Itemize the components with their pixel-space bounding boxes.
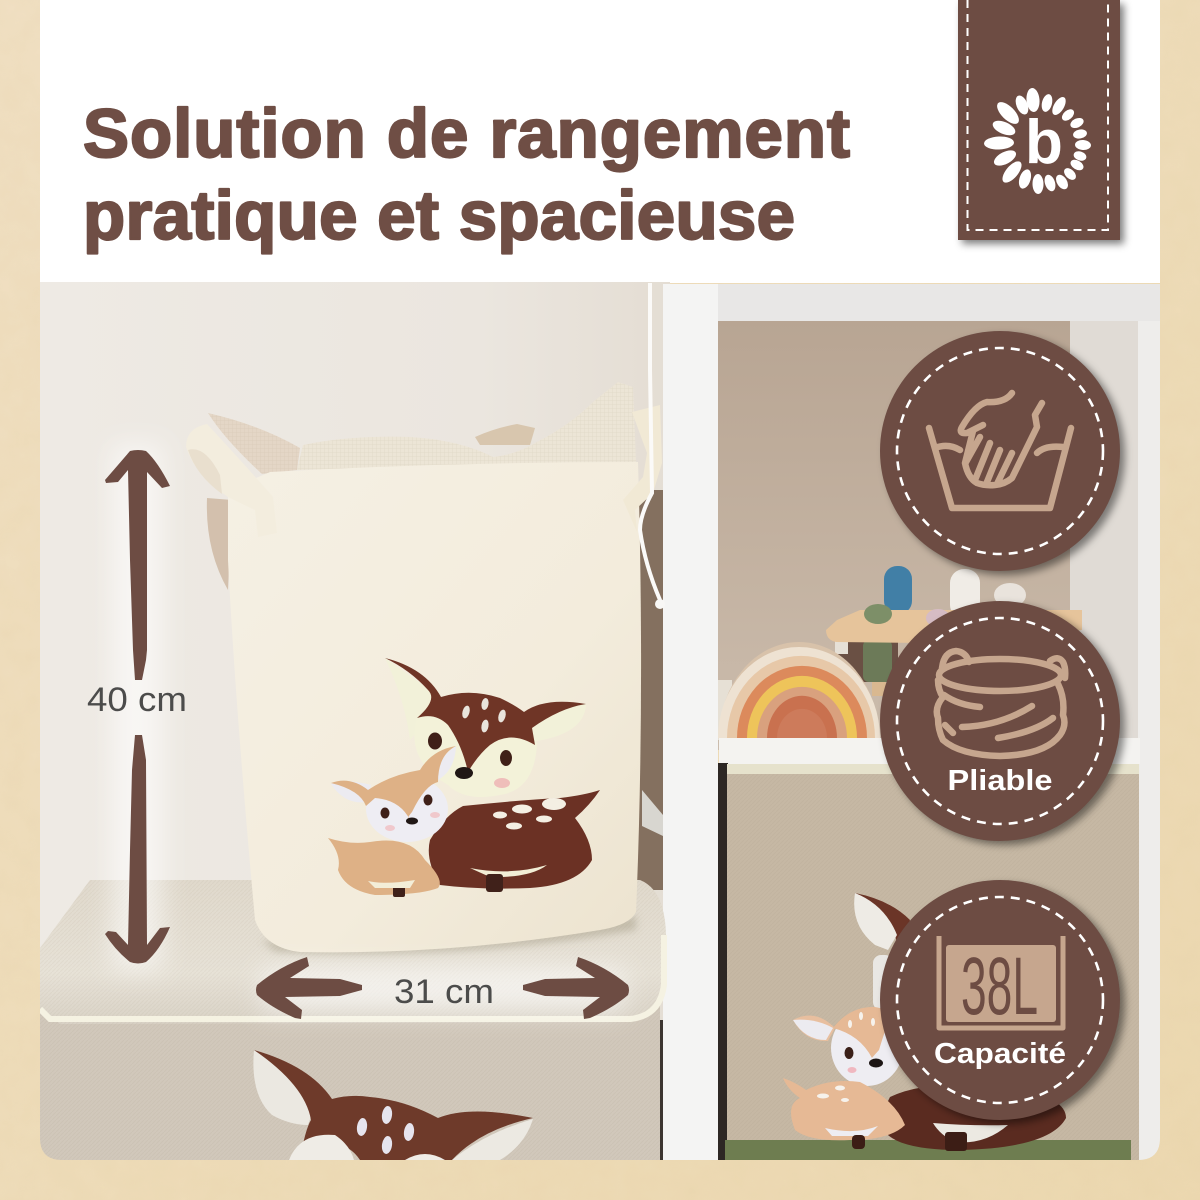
shelf vertical post [663, 284, 718, 1160]
linen box body lower left [40, 1000, 660, 1160]
basket back mesh [207, 382, 636, 590]
gap behind basket [637, 490, 663, 890]
big deer cheek [873, 955, 888, 1008]
height label: 40 cm [87, 681, 187, 719]
rainbow toy [718, 642, 880, 738]
wooden toy [826, 566, 1082, 696]
drawstring cord [640, 283, 665, 609]
deer on lower right box [783, 893, 1066, 1151]
icon: 38 litre container [939, 936, 1063, 1032]
shelf top board [716, 284, 1160, 321]
shelf cubby back [716, 320, 1076, 750]
storage basket [186, 405, 662, 952]
white header panel [40, 0, 1160, 283]
care label on basket [642, 790, 663, 836]
width label: 31 cm [394, 973, 494, 1011]
linen box lid lower left [40, 880, 666, 1024]
height arrow up [105, 450, 170, 680]
icon: collapsible basket [937, 651, 1065, 756]
handle inner shade [188, 449, 222, 494]
brand tag with logo [958, 0, 1124, 244]
mother deer ears [385, 658, 586, 742]
basket left handle [186, 424, 277, 537]
width arrow left [256, 957, 362, 1019]
label: Pliable: Pliable [948, 765, 1052, 797]
shelf cubby side [1070, 320, 1142, 750]
title: pratique et spacieuse [83, 177, 795, 254]
shelf plate [719, 738, 1140, 764]
basket shadow [262, 915, 636, 954]
embroidered deer family [328, 658, 600, 897]
title [83, 95, 850, 254]
baby deer head [366, 776, 448, 842]
arrow glows [112, 445, 624, 1012]
fawn ear [793, 1016, 835, 1041]
logo: flower b: b [1025, 108, 1063, 177]
basket right handle [626, 405, 662, 506]
dark gap beside lower box [718, 763, 728, 1160]
height arrow down [105, 735, 170, 964]
logo: flower b [984, 87, 1091, 194]
width arrow right [523, 957, 629, 1019]
mother deer face [414, 714, 537, 797]
label: Capacité: Capacité [934, 1038, 1066, 1070]
baby deer body [328, 838, 440, 895]
deer on lower left box [253, 1050, 533, 1160]
fawn body [783, 1078, 905, 1140]
badge: washable [880, 331, 1125, 575]
shelf right post [1138, 320, 1160, 1160]
big deer body [884, 1084, 1066, 1150]
big deer ear [856, 893, 910, 940]
dark sliver beside post [660, 1020, 663, 1160]
linen box lower right [725, 764, 1139, 1160]
title: Solution de rangement [83, 95, 850, 172]
mother deer head markings [385, 658, 586, 772]
badge: capacity [880, 880, 1125, 1124]
mother deer body [429, 790, 600, 889]
icon: hand washing basin [929, 393, 1071, 508]
icon: 38 litre container: 38L [961, 941, 1038, 1032]
fawn head [831, 1029, 899, 1086]
photo scene [40, 282, 1160, 1160]
badge: foldable [880, 601, 1125, 845]
shelf ledge behind rainbow [718, 680, 732, 740]
wall [40, 282, 670, 1042]
